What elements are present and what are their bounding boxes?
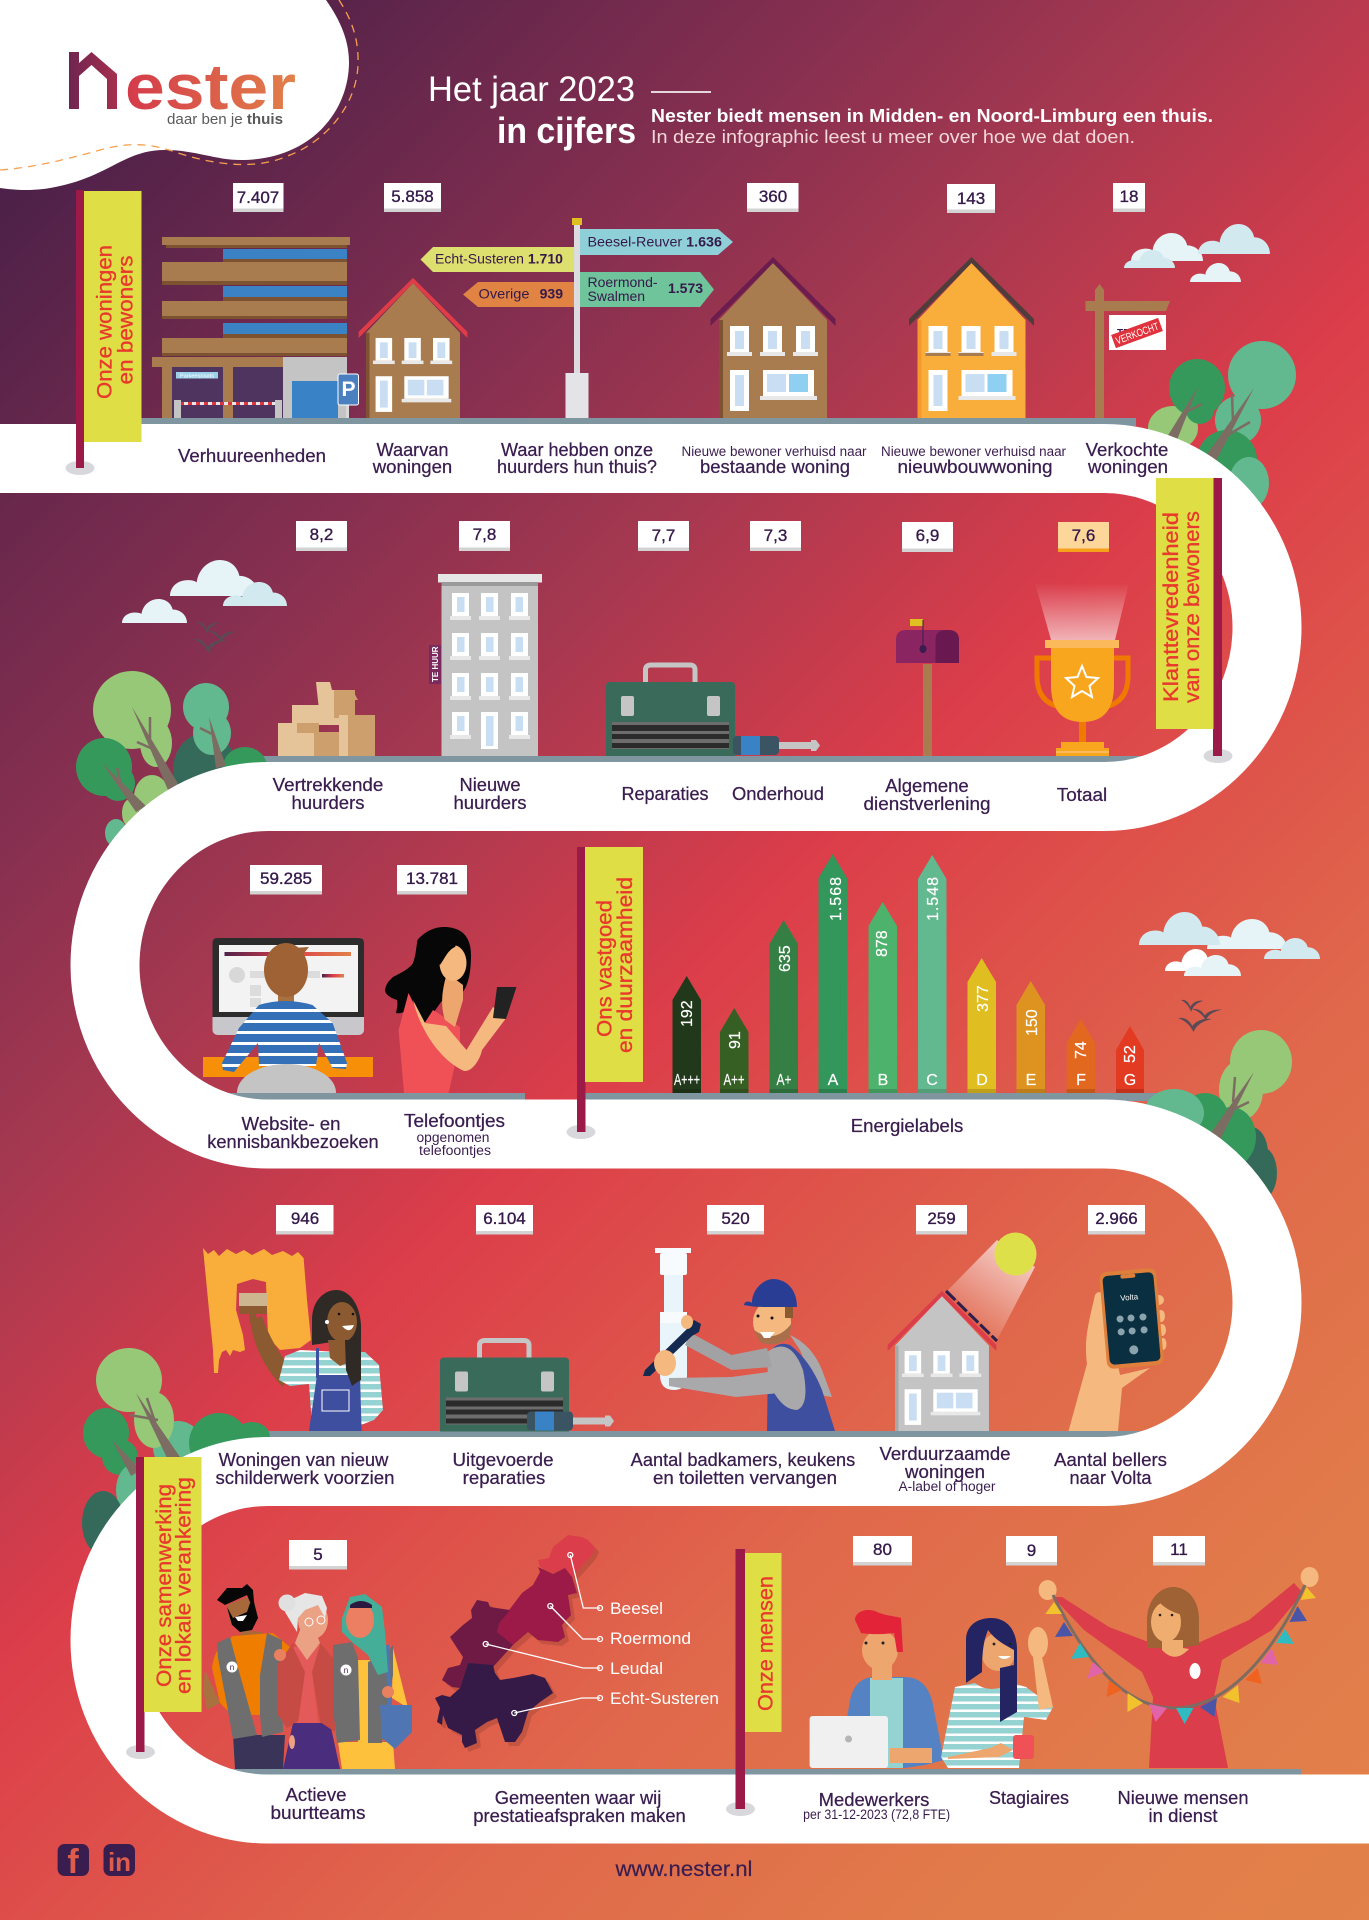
label: Verkochte woningen: Verkochte: [1086, 440, 1168, 460]
icon: house 143: [909, 257, 1034, 418]
label: nieuwbouwwoning: nieuwbouwwoning: [898, 457, 1052, 477]
number tag 7,8: [459, 521, 510, 551]
icon: hand holding phone: Volta: [1120, 1292, 1139, 1303]
dashed line around blob: [0, 0, 358, 170]
icon: facebook: f: [67, 1843, 79, 1881]
label: bestaande woning: bestaande woning: [700, 457, 850, 477]
clouds band 3: [1139, 912, 1320, 976]
label: Aantal bellers naar Volta: naar Volta: [1070, 1468, 1152, 1488]
number tag 9: [1006, 1536, 1057, 1566]
region: Beesel: [538, 1535, 595, 1577]
icon: hand holding phone: [1068, 1268, 1166, 1431]
icon: grey apartment building: TE HUUR: [431, 646, 440, 682]
trees: band 3 right: [1144, 1030, 1292, 1199]
number tag 80: 80: [873, 1540, 892, 1559]
man with vest: [203, 1584, 290, 1769]
bar F 74: F: [1076, 1072, 1086, 1089]
label: Gemeenten waar wij prestatieafspraken maken: [473, 1788, 686, 1826]
label: Vertrekkende huurders: huurders: [292, 793, 364, 813]
bar A 1.568: A: [828, 1072, 839, 1089]
number tag 946: 946: [291, 1209, 319, 1228]
number tag 8,2: [296, 521, 347, 551]
label: Algemene dienstverlening: [864, 776, 990, 814]
sign: Roermond-Swalmen: Roermond-: [588, 274, 658, 290]
flag: Ons vastgoed en duurzaamheid: [566, 847, 643, 1139]
bar A++ 91: A++: [724, 1072, 744, 1089]
bar C 1.548: C: [926, 1072, 938, 1089]
icon: facebook: [58, 1843, 89, 1881]
number tag 143: 143: [957, 189, 985, 208]
label: Woningen van nieuw schilderwerk voorzien: [216, 1450, 394, 1488]
flag: Onze mensen: [726, 1549, 782, 1816]
label: bestaande woning: Nieuwe bewoner verhuisd naar: [682, 444, 867, 459]
bar B 878: [868, 902, 897, 1093]
number tag 2.966: 2.966: [1095, 1209, 1138, 1228]
label: Algemene dienstverlening: dienstverlening: [864, 794, 990, 814]
label: Nieuwe huurders: [454, 775, 526, 813]
number tag 520: [707, 1205, 764, 1234]
bar A++ 91: [720, 1008, 748, 1093]
sign: Overige: [463, 282, 574, 307]
label: Actieve buurtteams: [270, 1785, 366, 1823]
number tag 7.407: 7.407: [237, 188, 279, 207]
woman with hijab: [333, 1594, 412, 1769]
icon: toolbox and screwdriver: [606, 665, 820, 756]
bar D 377: 377: [975, 985, 992, 1012]
region: Leudal: [442, 1600, 513, 1688]
logo blob: [0, 0, 349, 190]
number tag 8,2: 8,2: [310, 525, 333, 544]
number tag 7,7: [638, 521, 689, 551]
label: Uitgevoerde reparaties: [452, 1450, 554, 1488]
number tag 6,9: [902, 522, 953, 552]
icon: grey apartment building: [429, 574, 542, 756]
icon: apartment building with parking: [152, 237, 358, 418]
intro bold: Nester biedt mensen in Midden- en Noord-Limburg een thuis.: [651, 106, 1213, 126]
number tag 11: [1153, 1536, 1205, 1566]
number tag 7,3: [750, 521, 801, 551]
number tag 946: [276, 1205, 334, 1234]
map: four municipalities: [435, 1535, 719, 1752]
label: Waarvan woningen: [372, 440, 452, 477]
footer website: www.nester.nl: [614, 1858, 752, 1881]
leader lines: [483, 1552, 602, 1716]
intro light: In deze infographic leest u meer over hoe we dat doen.: [651, 127, 1135, 147]
number tag 6.104: 6.104: [483, 1209, 526, 1228]
bar A+++ 192: 192: [679, 1000, 696, 1027]
label: Nieuwe mensen in dienst: in dienst: [1148, 1806, 1218, 1826]
label: Telefoontjes: [404, 1111, 505, 1158]
bar A+++ 192: [672, 976, 701, 1093]
number tag 7,6 total: [1058, 522, 1109, 552]
icon: plumber with pipe: [643, 1248, 835, 1431]
label: Waar hebben onze huurders hun thuis?: Waar hebben onze: [501, 440, 653, 460]
sign: Overige: 939: [540, 286, 563, 302]
bar G 52: 52: [1122, 1045, 1139, 1063]
birds band 2: [193, 622, 237, 653]
bar A+ 635: 635: [777, 945, 794, 972]
icon: house 360: [710, 257, 836, 418]
icon: trophy: [1035, 583, 1129, 756]
icon: apartment building with parking: P: [341, 378, 356, 401]
flag: Onze samenwerking en lokale verankering: en lokale verankering: [173, 1477, 196, 1694]
sign: Roermond-Swalmen: 1.573: [668, 280, 703, 296]
label: bestaande woning: [682, 444, 867, 477]
logo: [69, 51, 296, 128]
label: Verduurzaamde woningen: woningen: [904, 1462, 985, 1482]
icon: sold sign: VERKOCHT: [1114, 320, 1161, 347]
sign: Echt-Susteren: Echt-Susteren 1.710: [435, 250, 563, 266]
label: Nieuwe huurders: huurders: [454, 793, 526, 813]
label: Woningen van nieuw schilderwerk voorzien: schilderwerk voorzien: [216, 1468, 394, 1488]
number tag 7,7: 7,7: [652, 526, 675, 545]
flag: Klanttevredenheid: [1156, 478, 1232, 763]
flag: Klanttevredenheid: van onze bewoners: [1181, 511, 1204, 703]
label: Nieuwe huurders: Nieuwe: [460, 775, 520, 795]
label: Medewerkers: [803, 1790, 950, 1822]
trees: top right: [1148, 341, 1296, 509]
label: Website- en kennisbankbezoeken: [207, 1114, 379, 1152]
label: Telefoontjes: Telefoontjes: [404, 1111, 505, 1131]
label: nieuwbouwwoning: [881, 444, 1066, 477]
number tag 7,8: 7,8: [473, 525, 496, 544]
flag: Onze woningen en bewoners: Onze woningen: [94, 245, 116, 399]
label: Telefoontjes: opgenomen: [416, 1130, 490, 1145]
icon: mailbox: [896, 619, 959, 756]
label: Reparaties: Reparaties: [622, 784, 708, 804]
number tag 360: 360: [759, 187, 787, 206]
label: Website- en kennisbankbezoeken: Website- en: [242, 1114, 340, 1134]
bar G 52: G: [1124, 1072, 1136, 1089]
icon: man with laptop: [810, 1610, 944, 1768]
ground strips: [141, 418, 1301, 1777]
number tag 259: 259: [927, 1209, 956, 1228]
bar E 150: [1016, 981, 1045, 1093]
icon: woman with mug, waving: [941, 1618, 1053, 1768]
label: Vertrekkende huurders: Vertrekkende: [273, 775, 383, 795]
flag: Ons vastgoed en duurzaamheid: en duurzaamheid: [614, 877, 637, 1053]
label: Gemeenten waar wij prestatieafspraken maken: prestatieafspraken maken: [473, 1806, 686, 1826]
label: Stagiaires: Stagiaires: [989, 1788, 1069, 1808]
sign: Beesel-Reuver: Beesel-Reuver 1.636: [588, 234, 722, 250]
number tag 143: [947, 184, 995, 213]
region: Echt-Susteren: [435, 1663, 553, 1748]
bar A 1.568: [818, 854, 847, 1093]
label: Algemene dienstverlening: Algemene: [885, 776, 969, 796]
map label Echt-Susteren: Echt-Susteren: [610, 1689, 719, 1708]
trees: band 4 left: [82, 1348, 270, 1555]
icon: woman painting wall: [203, 1248, 383, 1431]
number tag 360: [747, 183, 798, 212]
region: Roermond: [497, 1567, 577, 1645]
number tag 18: 18: [1120, 187, 1138, 206]
bar A+ 635: [770, 920, 798, 1093]
map label Leudal: Leudal: [610, 1659, 663, 1678]
label: Verduurzaamde woningen: A-label of hoger: [898, 1479, 996, 1494]
label: Energielabels: Energielabels: [851, 1116, 963, 1136]
label: Telefoontjes: telefoontjes: [419, 1143, 491, 1158]
bar D 377: D: [976, 1072, 988, 1089]
flag: Onze samenwerking en lokale verankering: Onze samenwerking: [153, 1484, 176, 1687]
sign: Roermond-Swalmen: [580, 272, 714, 307]
label: Aantal badkamers, keukens en toiletten vervangen: Aantal badkamers, keukens: [631, 1450, 855, 1470]
flag: Onze mensen: Onze mensen: [754, 1576, 778, 1711]
sign: Beesel-Reuver: [580, 229, 733, 255]
icon: person at computer: [203, 938, 373, 1093]
title line 2: in cijfers: [497, 110, 636, 151]
number tag 520: 520: [721, 1209, 750, 1228]
label: Woningen van nieuw schilderwerk voorzien: Woningen van nieuw: [219, 1450, 389, 1470]
map label Beesel: Beesel: [610, 1599, 663, 1618]
flag: Ons vastgoed en duurzaamheid: Ons vastgoed: [594, 900, 616, 1037]
icon: toolbox and screwdriver: [440, 1340, 614, 1432]
bar F 74: 74: [1073, 1041, 1090, 1059]
icon: woman holding bunting: [1039, 1567, 1319, 1768]
label: Aantal bellers naar Volta: Aantal bellers: [1054, 1450, 1167, 1470]
bar C 1.548: [918, 855, 946, 1093]
sign: Overige: Overige: [478, 286, 530, 302]
label: Waar hebben onze huurders hun thuis?: [497, 440, 657, 477]
bar A++ 91: 91: [727, 1031, 744, 1049]
label: Gemeenten waar wij prestatieafspraken maken: Gemeenten waar wij: [495, 1788, 661, 1808]
number tag 6,9: 6,9: [916, 526, 939, 545]
man with vest: n: [230, 1663, 234, 1672]
number tag 2.966: [1088, 1205, 1145, 1234]
number tag 5: [289, 1540, 347, 1570]
icon: sun and beam: [948, 1232, 1036, 1340]
label: Website- en kennisbankbezoeken: kennisbankbezoeken: [207, 1132, 379, 1152]
label: Actieve buurtteams: buurtteams: [270, 1803, 366, 1823]
number tag 7.407: [233, 183, 284, 212]
label: Actieve buurtteams: Actieve: [286, 1785, 346, 1805]
bar D 377: [968, 958, 996, 1093]
icon: sold sign: TE: [1117, 328, 1130, 339]
icon: linkedin: in: [108, 1847, 131, 1877]
icon: apartment building with parking: Parkeerplaats: [180, 374, 214, 380]
label: Uitgevoerde reparaties: reparaties: [463, 1468, 545, 1488]
label: Aantal badkamers, keukens en toiletten vervangen: en toiletten vervangen: [653, 1468, 837, 1488]
logo house letter: [69, 52, 117, 109]
bar C 1.548: 1.548: [925, 877, 942, 921]
number tag 7,6 total: 7,6: [1072, 526, 1095, 545]
number tag 259: [916, 1205, 967, 1234]
number tag 13.781: [397, 865, 467, 894]
signpost: [420, 218, 733, 418]
bar B 878: 878: [874, 930, 891, 957]
woman with hijab: n: [344, 1666, 348, 1675]
label: Waarvan woningen: woningen: [372, 457, 452, 477]
number tag 5: 5: [313, 1545, 323, 1564]
number tag 9: 9: [1027, 1541, 1036, 1560]
icon: house 5.858: [359, 278, 467, 418]
number tag 13.781: 13.781: [406, 869, 458, 888]
icon: sold sign: [1086, 284, 1170, 418]
energy label chart: [672, 854, 1144, 1093]
flag: Onze woningen en bewoners: [66, 190, 142, 475]
label: Vertrekkende huurders: [273, 775, 383, 813]
label: Medewerkers: Medewerkers: [819, 1790, 929, 1810]
bar B 878: B: [878, 1072, 888, 1089]
icon: three neighbourhood team members: [203, 1584, 412, 1769]
bar F 74: [1067, 1019, 1095, 1093]
number tag 59.285: [250, 865, 322, 894]
map label Roermond: Roermond: [610, 1629, 691, 1648]
sign: Echt-Susteren: [420, 247, 574, 272]
icon: woman with phone: [385, 927, 516, 1093]
clouds band 2: [122, 560, 287, 623]
number tag 5.858: [384, 183, 441, 212]
bar A+ 635: A+: [776, 1072, 792, 1089]
label: nieuwbouwwoning: Nieuwe bewoner verhuisd naar: [881, 444, 1066, 459]
icon: linkedin: [104, 1844, 135, 1877]
label: Verhuureenheden: Verhuureenheden: [178, 446, 326, 466]
flag: Klanttevredenheid: Klanttevredenheid: [1160, 512, 1183, 702]
bar G 52: [1116, 1026, 1144, 1093]
label: Uitgevoerde reparaties: Uitgevoerde: [452, 1450, 554, 1470]
bar E 150: E: [1026, 1072, 1036, 1089]
number tag 5.858: 5.858: [391, 187, 434, 206]
sign: Roermond-Swalmen: Swalmen: [588, 288, 645, 304]
trees: band 2 left: [76, 671, 267, 847]
winding white road: [0, 458, 1369, 1809]
label: Verkochte woningen: woningen: [1087, 457, 1168, 477]
label: Nieuwe mensen in dienst: [1118, 1788, 1248, 1826]
label: Verkochte woningen: [1086, 440, 1168, 477]
label: Waarvan woningen: Waarvan: [376, 440, 448, 460]
title: [428, 70, 1213, 151]
label: Totaal: Totaal: [1057, 785, 1107, 805]
label: Verduurzaamde woningen: Verduurzaamde: [880, 1444, 1010, 1464]
label: Aantal badkamers, keukens en toiletten vervangen: [631, 1450, 855, 1488]
birds band 3: [1178, 1000, 1222, 1032]
icon: moving boxes: [278, 682, 375, 756]
number tag 80: [853, 1536, 912, 1566]
clouds top right: [1124, 224, 1270, 282]
bar A 1.568: 1.568: [828, 877, 845, 921]
logo wordmark: ester: [125, 51, 296, 123]
older woman: [274, 1593, 340, 1769]
label: Waar hebben onze huurders hun thuis?: huurders hun thuis?: [497, 457, 657, 477]
label: Nieuwe mensen in dienst: Nieuwe mensen: [1118, 1788, 1248, 1808]
number tag 7,3: 7,3: [764, 526, 787, 545]
flag: Onze woningen en bewoners: en bewoners: [114, 256, 138, 384]
number tag 59.285: 59.285: [260, 869, 312, 888]
label: Aantal bellers naar Volta: [1054, 1450, 1167, 1488]
bar A+++ 192: A+++: [674, 1072, 700, 1089]
number tag 18: [1113, 183, 1145, 212]
label: Medewerkers: per 31-12-2023 (72,8 FTE): [803, 1807, 950, 1822]
title line 1: Het jaar 2023: [428, 70, 635, 109]
number tag 11: 11: [1170, 1540, 1188, 1559]
number tag 6.104: [476, 1205, 533, 1234]
flag: Onze samenwerking en lokale verankering: [126, 1457, 202, 1759]
bar E 150: 150: [1024, 1009, 1041, 1036]
label: Verduurzaamde woningen: [880, 1444, 1010, 1494]
label: Onderhoud: Onderhoud: [732, 784, 824, 804]
logo tagline: daar ben je thuis: [167, 112, 283, 128]
icon: grey house with solar panels: [888, 1291, 997, 1431]
